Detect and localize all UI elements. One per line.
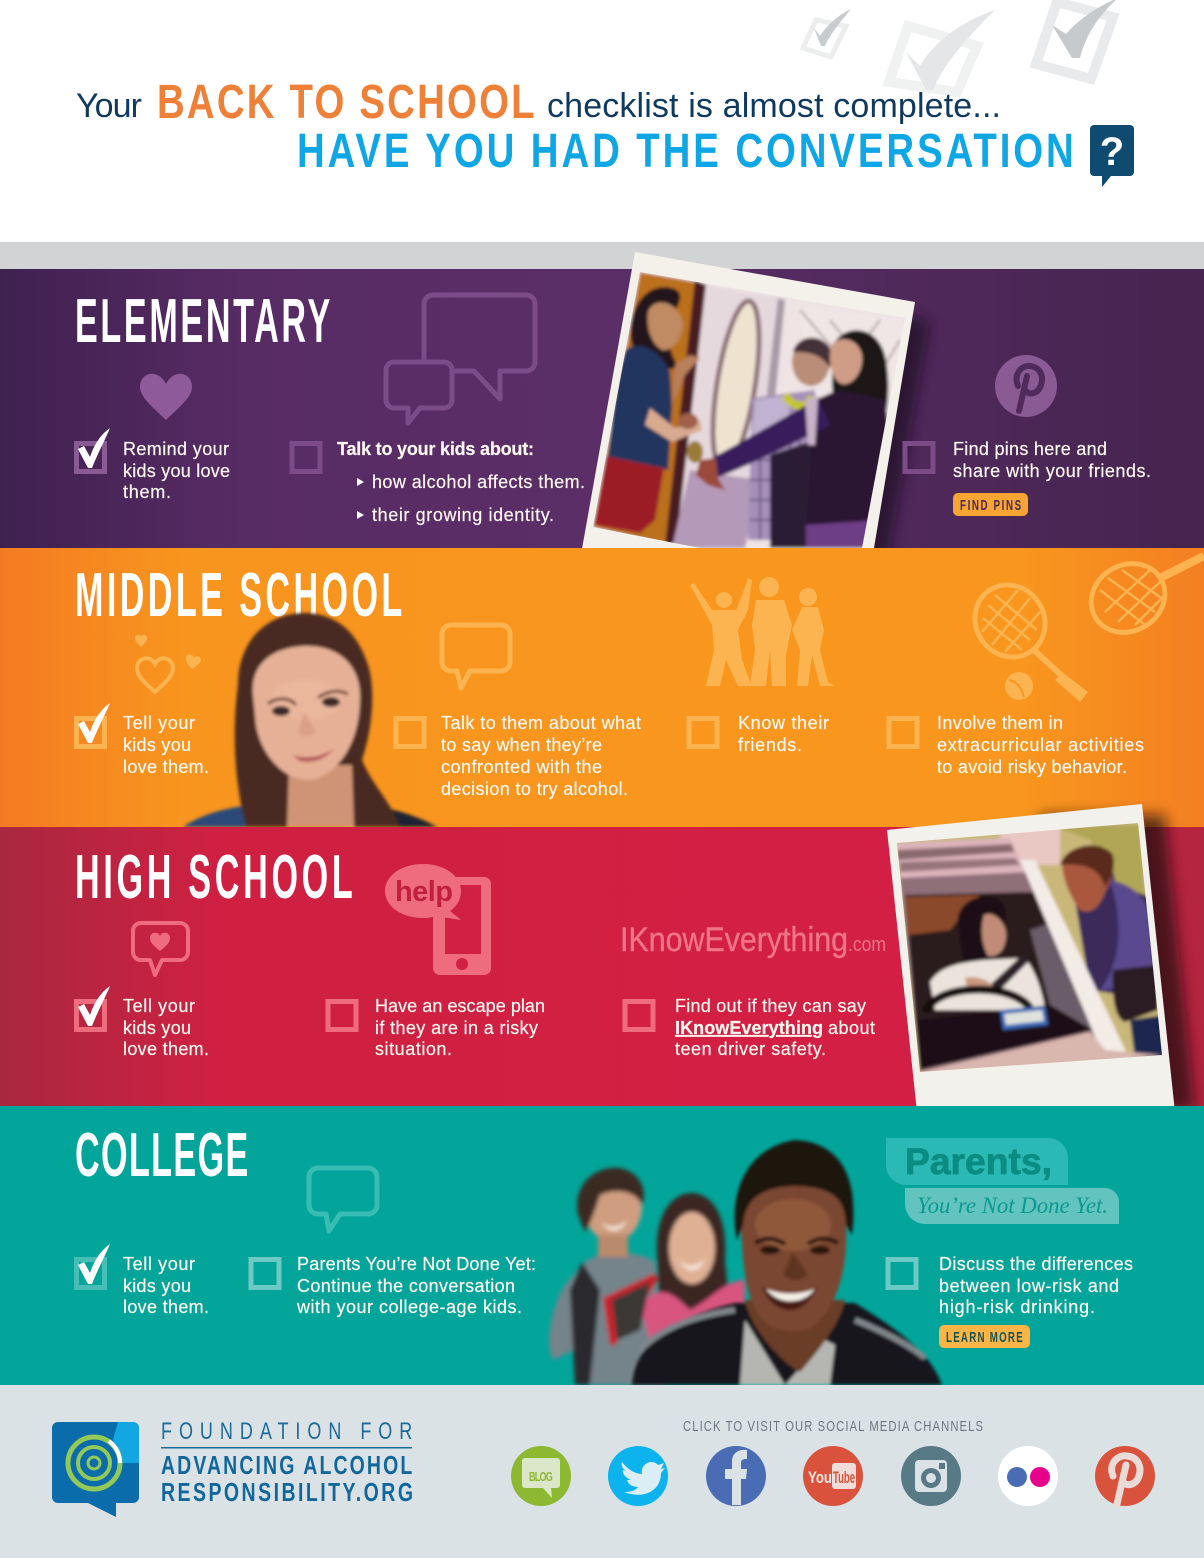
checkbox: talk <box>292 444 320 472</box>
icon: flickr <box>998 1446 1058 1506</box>
text: talk: how alcohol affects them. <box>372 472 585 492</box>
icon: instagram <box>901 1446 961 1506</box>
text: love: kids you <box>123 735 191 755</box>
checkbox: pins <box>905 444 933 472</box>
icon: speech bubble <box>309 1168 377 1231</box>
text: discuss: high-risk drinking. <box>939 1297 1095 1317</box>
text: pins <box>953 439 1151 481</box>
text: remind: them. <box>123 482 171 502</box>
text: remind: Remind your <box>123 439 229 459</box>
icon: tennis racket and ball <box>961 571 1088 702</box>
button: learn more: LEARN MORE <box>946 1329 1023 1346</box>
text: talk: Talk to them about what <box>441 713 641 733</box>
icon: speech bubbles <box>386 295 535 423</box>
checkbox: escape <box>328 1002 356 1030</box>
text: activities: extracurricular activities <box>937 735 1144 755</box>
heading: middle school: MIDDLE SCHOOL <box>75 560 402 630</box>
label: not done yet bubble: You’re Not Done Yet. <box>917 1193 1108 1218</box>
checked box: love <box>76 1244 110 1288</box>
checkbox: friends <box>689 718 717 746</box>
text: iknoweverything <box>675 996 875 1059</box>
heading: college: COLLEGE <box>75 1120 248 1190</box>
logo: iknoweverything: .com <box>848 934 886 956</box>
checkbox: activities <box>889 718 917 746</box>
text: talk: their growing identity. <box>372 505 554 525</box>
panel: middle school <box>0 548 1204 827</box>
text: love <box>123 996 209 1059</box>
panel: footer <box>0 1385 1204 1558</box>
text: love: Tell your <box>123 713 195 733</box>
text: talk: confronted with the <box>441 757 602 777</box>
text: conversation: Continue the conversation <box>297 1276 515 1296</box>
text: love: Tell your <box>123 1254 195 1274</box>
icon: speech bubble <box>442 625 510 688</box>
text: remind: kids you love <box>123 461 230 481</box>
text: conversation: with your college-age kids. <box>296 1297 522 1317</box>
logo: iknoweverything: IKnowEverything <box>620 921 848 959</box>
text: iknoweverything: Find out if they can say <box>675 996 866 1016</box>
checkbox: conversation <box>251 1260 279 1288</box>
icon: pinterest <box>995 355 1057 417</box>
title line 1: Your <box>76 87 142 125</box>
text: love: love them. <box>123 1297 209 1317</box>
text: iknoweverything: about <box>828 1018 875 1038</box>
button: learn more <box>939 1325 1030 1348</box>
icon: pinterest <box>1095 1446 1155 1506</box>
photo: family at door <box>580 252 930 560</box>
text: talk <box>441 713 641 799</box>
icon: heart <box>140 374 192 420</box>
photo: smiling girl <box>183 613 437 827</box>
logo: foundation name: ADVANCING ALCOHOL <box>161 1450 412 1480</box>
panel: high school <box>0 804 1204 1112</box>
title line 2: HAVE YOU HAD THE CONVERSATION <box>297 125 1074 178</box>
checkbox: iknoweverything <box>625 1002 653 1030</box>
logo: foundation name: RESPONSIBILITY.ORG <box>161 1477 413 1507</box>
panel: college <box>0 1106 1204 1385</box>
icon: blog: BLOG <box>529 1471 553 1484</box>
text: friends: Know their <box>738 713 829 733</box>
title line 1: BACK TO SCHOOL <box>157 76 535 129</box>
heading: high school: HIGH SCHOOL <box>75 842 353 912</box>
icon: question bubble <box>1090 125 1134 187</box>
title line 1 <box>76 76 1001 129</box>
heading: elementary: ELEMENTARY <box>75 286 330 356</box>
text: conversation <box>296 1254 536 1317</box>
text: love: love them. <box>123 757 209 777</box>
label: not done yet bubble <box>905 1188 1119 1224</box>
text: talk <box>337 439 585 525</box>
button: find pins <box>953 493 1028 516</box>
checkbox: discuss <box>888 1260 916 1288</box>
text: pins: Find pins here and <box>953 439 1107 459</box>
icon: twitter <box>608 1446 668 1506</box>
text: love <box>123 1254 209 1317</box>
text: discuss: Discuss the differences <box>939 1254 1133 1274</box>
text: escape plan: situation. <box>375 1039 452 1059</box>
panel: elementary <box>0 252 1204 560</box>
text: love: kids you <box>123 1276 191 1296</box>
logo: foundation icon <box>52 1422 139 1517</box>
checkbox: talk <box>396 718 424 746</box>
text: activities <box>937 713 1144 777</box>
text: activities: to avoid risky behavior. <box>937 757 1127 777</box>
text: conversation: Parents You’re Not Done Yet: <box>297 1254 536 1274</box>
text: love: kids you <box>123 1018 191 1038</box>
label: parents bubble <box>886 1138 1068 1185</box>
icon: heart bubble <box>133 923 188 975</box>
icon: youtube <box>803 1446 863 1506</box>
icon: help phone <box>385 864 491 975</box>
checked box: love <box>76 703 110 746</box>
logo: foundation name <box>161 1419 413 1507</box>
photo: college students <box>549 1140 942 1385</box>
icon: help phone: help <box>395 876 453 908</box>
text: love <box>123 713 209 777</box>
logo: foundation name: FOUNDATION FOR <box>161 1419 412 1445</box>
decorative ghost checkboxes <box>803 0 1118 92</box>
text: talk: to say when they’re <box>441 735 602 755</box>
icon: facebook <box>706 1446 766 1506</box>
text: social media prompt: CLICK TO VISIT OUR SOCIAL MEDIA CHANNELS <box>683 1417 983 1434</box>
label: parents bubble: Parents, <box>905 1141 1052 1182</box>
checked box: remind <box>76 428 110 472</box>
text: talk: Talk to your kids about: <box>337 439 534 459</box>
icon: tennis racket top right <box>1079 550 1204 646</box>
text: friends: friends. <box>738 735 802 755</box>
icon: hearts <box>135 635 201 692</box>
icon: youtube: Tube <box>833 1468 855 1487</box>
icon: friends silhouettes <box>690 577 835 686</box>
text: love: Tell your <box>123 996 195 1016</box>
text: escape plan: if they are in a risky <box>375 1018 538 1038</box>
title line 1: checklist is almost complete... <box>547 87 1001 125</box>
icon: youtube: You <box>808 1468 832 1487</box>
text: friends <box>738 713 829 755</box>
text: love: love them. <box>123 1039 209 1059</box>
text: talk: decision to try alcohol. <box>441 779 628 799</box>
icon: blog <box>511 1446 571 1506</box>
text: discuss: between low-risk and <box>939 1276 1119 1296</box>
icon: question bubble: ? <box>1100 130 1124 174</box>
text: remind <box>123 439 230 502</box>
grey band <box>0 242 1204 269</box>
checked box: love <box>76 986 110 1030</box>
button: find pins: FIND PINS <box>960 497 1021 514</box>
text: pins: share with your friends. <box>953 461 1151 481</box>
photo: driver and father <box>887 804 1195 1112</box>
text: discuss <box>939 1254 1133 1317</box>
text: escape plan <box>375 996 545 1059</box>
text: iknoweverything: IKnowEverything <box>675 1018 823 1038</box>
text: activities: Involve them in <box>937 713 1063 733</box>
text: escape plan: Have an escape plan <box>375 996 545 1016</box>
text: iknoweverything: teen driver safety. <box>675 1039 826 1059</box>
